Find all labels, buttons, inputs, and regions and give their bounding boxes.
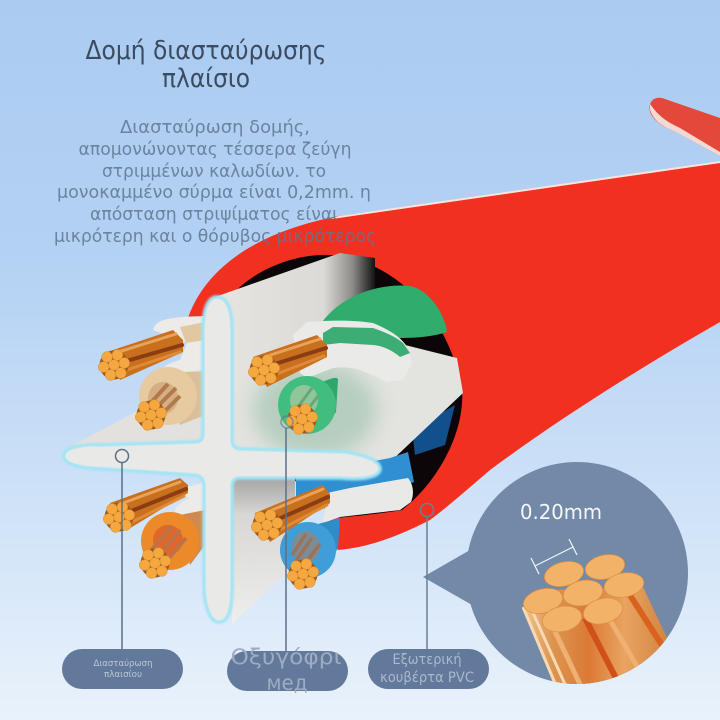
- cross divider: left panel: [64, 375, 205, 450]
- cross divider: upper panel: [215, 253, 375, 450]
- red PVC cable jacket: [187, 161, 720, 550]
- leader: copper: [281, 416, 293, 652]
- label pill: outer PVC jacket: [368, 649, 489, 689]
- description text: Διασταύρωση δομής,: [120, 118, 310, 138]
- description text: [54, 118, 376, 247]
- cross divider front face: [64, 297, 380, 622]
- tan wire: [135, 367, 205, 430]
- label pill: oxygen-free copper: Οξυγόφρι: [230, 645, 342, 669]
- green shadow on panel: [253, 362, 377, 458]
- label pill: oxygen-free copper: [227, 645, 348, 695]
- title: Δομή διασταύρωσης: [86, 36, 326, 66]
- description text: απομονώνοντας τέσσερα ζεύγη: [78, 140, 352, 160]
- green pair back wire: [320, 286, 447, 338]
- orange wire: [139, 510, 205, 578]
- green copper strand: [248, 335, 327, 387]
- measure value: 0.20mm: [520, 500, 602, 524]
- far cable end: [650, 98, 720, 156]
- label pill: outer PVC jacket: Εξωτερική: [392, 652, 462, 668]
- tan stripe: [180, 322, 205, 343]
- copper strand bodies: [522, 587, 667, 684]
- callout: strand diameter: [423, 462, 688, 700]
- deep blue glow inside opening: [412, 405, 455, 455]
- label pill: cross frame: πλαισίου: [104, 670, 142, 680]
- measure bracket: [531, 539, 577, 574]
- description text: απόσταση στριψίματος είναι: [90, 205, 338, 225]
- description text: μονοκαμμένο σύρμα είναι 0,2mm. η: [57, 183, 371, 203]
- blue wire: [280, 518, 340, 589]
- leader: jacket: [420, 504, 434, 650]
- cable opening: [228, 255, 462, 518]
- green wire: [278, 376, 338, 434]
- label pill: oxygen-free copper: мед: [266, 671, 308, 695]
- cross divider: right panel: [232, 340, 463, 464]
- green wire with white stripe: [293, 321, 412, 382]
- label pill: cross frame: Διασταύρωση: [94, 658, 152, 669]
- blue pair behind divider: [296, 452, 414, 523]
- description text: στριμμένων καλωδίων. το: [102, 162, 326, 182]
- label pill: outer PVC jacket: κουβέρτα PVC: [380, 670, 474, 686]
- copper strand ends: [521, 551, 646, 635]
- lower left white wire: [170, 482, 205, 516]
- blue copper strand: [251, 485, 330, 542]
- title: [86, 36, 326, 94]
- title: πλαίσιο: [162, 64, 250, 94]
- leader: cross frame: [116, 450, 128, 650]
- lower left copper strand: [103, 478, 188, 532]
- upper left copper strand: [98, 330, 183, 380]
- label pill: cross frame: [62, 649, 183, 689]
- description text: μικρότερη και ο θόρυβος μικρότερος: [54, 227, 376, 247]
- cross divider: lower panel: [232, 478, 295, 624]
- upper left white wire: [153, 316, 205, 373]
